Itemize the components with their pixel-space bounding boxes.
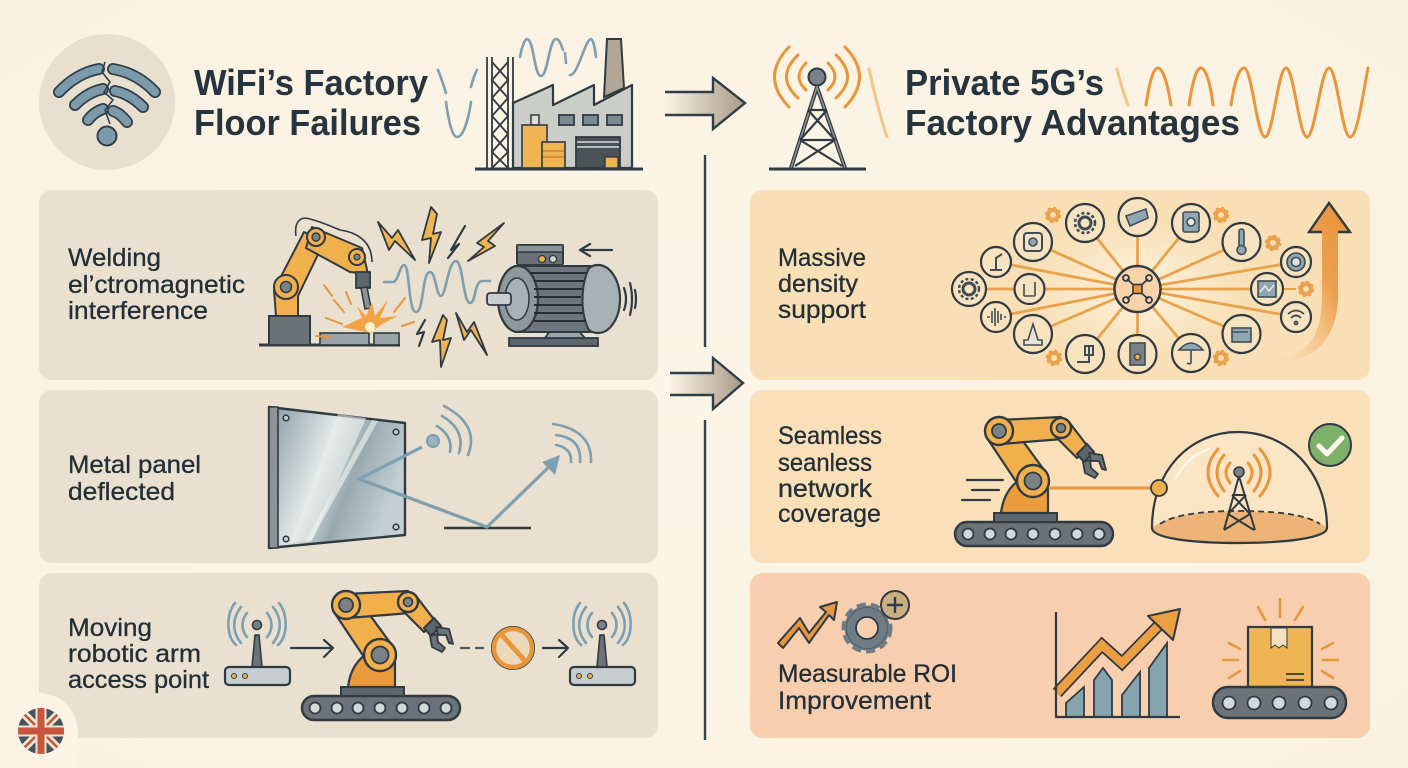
icon: growth arrow bbox=[1280, 203, 1350, 362]
icon: 5G signal wave bbox=[869, 68, 1368, 137]
title: Private 5G advantages: Factory Advantages bbox=[905, 102, 1240, 143]
icon: blocked signal bbox=[460, 627, 568, 669]
text: seamless label: network bbox=[778, 475, 873, 503]
text: ROI label: Improvement bbox=[778, 687, 931, 715]
title: Private 5G advantages bbox=[905, 62, 1240, 143]
icon: metal sheet bbox=[269, 407, 405, 548]
title: Private 5G advantages: Private 5G’s bbox=[905, 62, 1104, 103]
divider: upper vertical line bbox=[704, 155, 706, 347]
text: ROI label bbox=[778, 660, 957, 715]
panel: moving robot arm bbox=[39, 573, 658, 738]
divider: lower vertical line bbox=[704, 420, 706, 740]
title: WiFi failures bbox=[194, 62, 428, 143]
text: massive density label bbox=[778, 244, 866, 324]
text: welding label: Welding bbox=[68, 244, 161, 272]
text: welding label: interference bbox=[68, 297, 208, 325]
icon: interference bolts and wave bbox=[378, 207, 504, 367]
text: massive density label: support bbox=[778, 296, 866, 324]
icon: UK flag badge bbox=[18, 693, 78, 754]
icon: motion lines bbox=[962, 480, 1003, 500]
text: metal panel label bbox=[68, 451, 201, 506]
icon: welding robot bbox=[259, 218, 414, 345]
icon: factory with waves bbox=[438, 39, 643, 169]
text: metal panel label: deflected bbox=[68, 478, 175, 506]
icon: robot arm bbox=[955, 417, 1113, 546]
text: moving robot label: Moving bbox=[68, 614, 152, 642]
icon: left router bbox=[225, 603, 290, 685]
text: seamless label bbox=[778, 422, 882, 528]
text: seamless label: Seamless bbox=[778, 422, 882, 450]
icon: coverage dome bbox=[1151, 432, 1327, 543]
icon: right router bbox=[570, 603, 635, 685]
panel: metal panel deflection bbox=[39, 390, 658, 563]
icon: small gears bbox=[1046, 208, 1313, 365]
text: seamless label: seanless bbox=[778, 449, 872, 477]
icon: robot arm on tracks bbox=[302, 591, 460, 720]
panel: welding interference bbox=[39, 190, 658, 380]
chart: ROI growth bbox=[1056, 609, 1180, 717]
text: ROI label: Measurable ROI bbox=[778, 660, 957, 688]
panel: ROI improvement bbox=[750, 573, 1370, 738]
icon: green check bbox=[1309, 424, 1351, 466]
text: welding label: el’ctromagnetic bbox=[68, 271, 245, 299]
icon: small growth arrow bbox=[778, 602, 837, 648]
text: massive density label: Massive bbox=[778, 244, 866, 272]
icon: electric motor bbox=[487, 244, 636, 346]
text: metal panel label: Metal panel bbox=[68, 451, 201, 479]
icon: gear with plus bbox=[844, 591, 909, 651]
panel: WiFi header icon bbox=[39, 34, 175, 170]
text: welding label bbox=[68, 244, 245, 325]
title: WiFi failures: Floor Failures bbox=[194, 102, 421, 143]
text: moving robot label bbox=[68, 614, 209, 694]
arrow: header transition bbox=[665, 78, 745, 129]
icon: package on conveyor bbox=[1213, 599, 1346, 718]
panel: seamless coverage bbox=[750, 390, 1370, 563]
text: massive density label: density bbox=[778, 270, 858, 298]
connector: robot to dome bbox=[1050, 486, 1153, 490]
icon: device glyphs bbox=[959, 209, 1305, 365]
icon: central hub bbox=[1114, 266, 1160, 312]
arrow: centre transition bbox=[670, 358, 743, 409]
chart: device network bbox=[952, 198, 1313, 373]
icon: deflected signal bbox=[359, 406, 591, 528]
icon: 5G tower bbox=[769, 47, 866, 169]
text: seamless label: coverage bbox=[778, 500, 881, 528]
arrow: router to robot bbox=[291, 640, 333, 657]
text: moving robot label: robotic arm bbox=[68, 640, 201, 668]
text: moving robot label: access point bbox=[68, 666, 209, 694]
panel: massive density bbox=[750, 190, 1370, 380]
title: WiFi failures: WiFi’s Factory bbox=[194, 62, 428, 103]
